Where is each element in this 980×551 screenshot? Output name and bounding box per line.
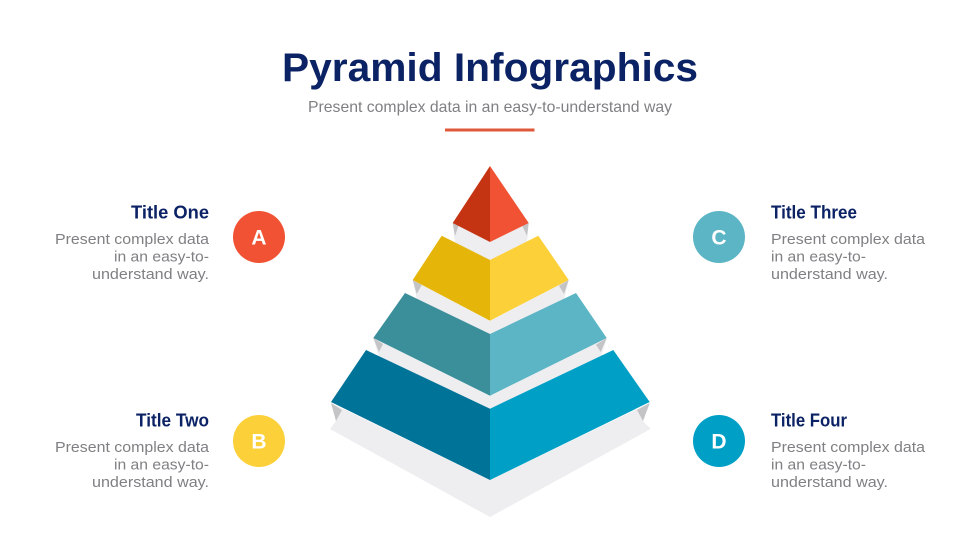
- block: Title Four: [771, 410, 926, 491]
- floor shadow: [330, 403, 650, 517]
- description: understand way.: [92, 266, 209, 283]
- badge A: A: [251, 226, 267, 250]
- tier: red apex: [453, 166, 529, 242]
- badge D: D: [711, 430, 727, 454]
- description: in an easy-to-: [114, 248, 209, 266]
- badge B: [233, 415, 285, 467]
- badge C: [693, 211, 745, 263]
- description: in an easy-to-: [771, 456, 866, 474]
- tier: teal: [373, 293, 607, 396]
- heading: Title One: [131, 202, 209, 222]
- block: Title One: [55, 202, 210, 283]
- fold triangles: [331, 223, 650, 421]
- description: Present complex data: [55, 439, 210, 456]
- badge A: [233, 211, 285, 263]
- description: Present complex data: [55, 231, 210, 248]
- heading: Title Three: [771, 202, 857, 222]
- block: Title Two: [55, 410, 210, 491]
- heading: Title Two: [136, 410, 209, 430]
- description: Present complex data: [771, 231, 926, 248]
- description: in an easy-to-: [771, 248, 866, 266]
- description: understand way.: [771, 474, 888, 491]
- description: Present complex data: [771, 439, 926, 456]
- description: [771, 231, 926, 283]
- heading: Title Four: [771, 410, 847, 430]
- description: [55, 231, 210, 283]
- shadow band under yellow tier: [413, 280, 569, 335]
- tier: yellow: [413, 236, 569, 321]
- description: [771, 439, 926, 491]
- tier: blue: [331, 350, 650, 480]
- title accent rule: [445, 128, 534, 132]
- block: Title Three: [771, 202, 926, 283]
- badge C: C: [711, 226, 727, 250]
- shadow band under red tier: [453, 223, 529, 261]
- description: in an easy-to-: [114, 456, 209, 474]
- description: [55, 439, 210, 491]
- title: Pyramid Infographics: [282, 46, 698, 90]
- badge B: B: [251, 430, 267, 454]
- shadow band under teal tier: [373, 338, 607, 410]
- badge D: [693, 415, 745, 467]
- pyramid: [330, 166, 650, 517]
- subtitle: Present complex data in an easy-to-understand way: [308, 99, 672, 116]
- description: understand way.: [92, 474, 209, 491]
- description: understand way.: [771, 266, 888, 283]
